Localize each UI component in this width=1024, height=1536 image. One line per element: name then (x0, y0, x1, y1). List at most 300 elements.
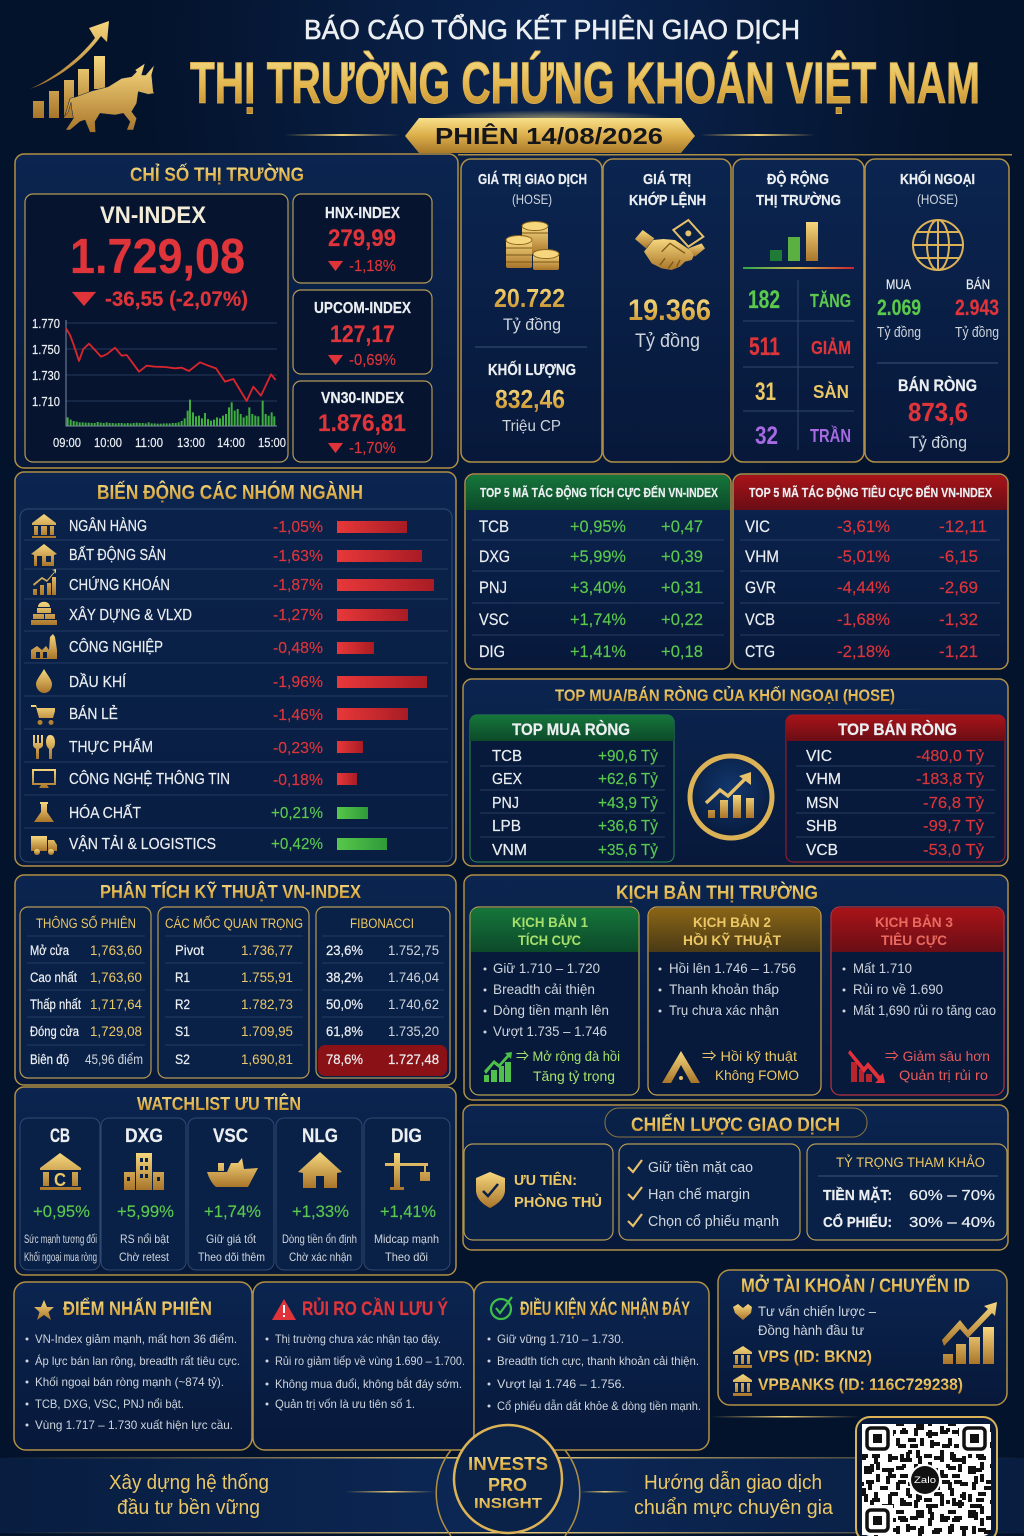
card: foreign investors: Tỷ đồng (877, 324, 921, 341)
panel: risks: Thị trường chưa xác nhận tạo đáy. (275, 1332, 441, 1346)
footer slogan left: Xây dựng hệ thống (109, 1472, 269, 1494)
card: DXG (101, 1118, 186, 1270)
panel: market scenarios (464, 875, 1008, 1100)
panel: session highlights: TCB, DXG, VSC, PNJ nổi bật. (35, 1397, 184, 1411)
table: top net buy: +36,6 Tỷ (598, 818, 658, 835)
VN30-Index card (293, 381, 432, 462)
card: matched order value: Tỷ đồng (635, 331, 700, 352)
row: food (69, 738, 363, 757)
table: top net buy: +62,6 Tỷ (598, 771, 658, 788)
card: allocation: 30% – 40% (909, 1214, 995, 1231)
card: matched order value: GIÁ TRỊ (643, 171, 691, 188)
card: trading value: GIÁ TRỊ GIAO DỊCH (478, 171, 587, 188)
table: top positive impact: DIG (479, 642, 505, 661)
heading: strategy: CHIẾN LƯỢC GIAO DỊCH (631, 1114, 840, 1136)
card: NLG: Chờ xác nhận (289, 1250, 352, 1264)
card: priority defensive: ƯU TIÊN: (514, 1171, 577, 1189)
panel: bottom confirmation: Breadth tích cực, thanh khoản cải thiện. (497, 1354, 699, 1368)
row: chemicals: +0,21% (271, 805, 323, 822)
panel: bottom confirmation (474, 1282, 709, 1450)
card: market breadth (733, 159, 864, 462)
panel: session highlights: Khối ngoại bán ròng mạnh (~874 tỷ). (35, 1375, 224, 1389)
panel: risks (253, 1282, 474, 1450)
table: top positive impact (465, 474, 731, 669)
table: session stats: Đóng cửa (30, 1024, 79, 1039)
card: trading value: 20.722 (494, 283, 565, 313)
line chart: intraday VN-Index: 09:00 (53, 435, 81, 450)
card: CB: +0,95% (33, 1203, 90, 1221)
table: key levels: R1 (175, 970, 190, 985)
card: foreign investors: KHỐI NGOẠI (900, 170, 975, 188)
footer slogan right: Hướng dẫn giao dịch (644, 1471, 822, 1494)
card: DIG (364, 1118, 450, 1270)
QR code (856, 1417, 997, 1536)
panel: session highlights: Áp lực bán lan rộng, breadth rất tiêu cực. (35, 1353, 240, 1368)
table: top positive impact: +0,47 (661, 517, 703, 536)
UPCOM-Index card: 127,17 (330, 321, 395, 348)
table: top positive impact: +0,18 (661, 642, 703, 661)
row: securities: CHỨNG KHOÁN (69, 577, 170, 594)
card: trading value: (HOSE) (512, 191, 552, 207)
VN30-Index card: 1.876,81 (318, 410, 406, 437)
card: market breadth: ĐỘ RỘNG (767, 170, 829, 188)
table: top negative impact: -3,61% (837, 517, 890, 536)
row: logistics: VẬN TẢI & LOGISTICS (69, 836, 216, 853)
card: market breadth: SÀN (813, 381, 849, 402)
table: top positive impact: VSC (479, 610, 509, 629)
card: CB (20, 1118, 100, 1270)
HNX-Index card: HNX-INDEX (325, 205, 400, 222)
date banner (405, 110, 695, 153)
row: food: THỰC PHẨM (69, 738, 153, 756)
icon: handshake (635, 220, 705, 270)
table: top negative impact: -2,18% (837, 642, 890, 661)
scenario 2: technical rebound: Hồi lên 1.746 – 1.756 (669, 960, 796, 976)
row: chemicals: HÓA CHẤT (69, 805, 141, 822)
table: fibonacci: 61,8% (326, 1024, 363, 1039)
panel: risks: RỦI RO CẦN LƯU Ý (302, 1298, 448, 1320)
card: foreign investors (865, 159, 1009, 462)
panel: open account: Đồng hành đầu tư (758, 1322, 864, 1338)
card: matched order value (603, 159, 731, 462)
table: top negative impact: -1,21 (939, 642, 978, 661)
logo: bull and rising chart (30, 21, 154, 132)
footer band (0, 1416, 1024, 1536)
panel: technical analysis (15, 875, 456, 1085)
icon: down chart (848, 1050, 885, 1083)
scenario 3: negative: Rủi ro về 1.690 (853, 981, 943, 997)
scenario 3: negative: ⇒ Giảm sâu hơn (885, 1048, 990, 1064)
VN30-Index card: VN30-INDEX (321, 390, 404, 407)
table: top net buy (470, 715, 674, 862)
table: session stats: Cao nhất (30, 970, 77, 985)
table: key levels: 1.709,95 (241, 1024, 293, 1039)
panel: session highlights: ĐIỂM NHẤN PHIÊN (63, 1298, 212, 1320)
heading: watchlist: WATCHLIST ƯU TIÊN (137, 1093, 301, 1114)
row: industry: -0,48% (273, 640, 323, 657)
card: priority defensive (464, 1144, 613, 1240)
table: top positive impact: +0,39 (661, 547, 703, 566)
VN-Index card: 1.729,08 (70, 230, 245, 284)
table: top negative impact: VIC (745, 517, 770, 536)
scenario 3: negative: Quản trị rủi ro (899, 1067, 988, 1083)
table: session stats: 45,96 điểm (85, 1052, 143, 1067)
card: DXG: Chờ retest (119, 1250, 170, 1264)
row: real estate: -1,63% (273, 548, 323, 565)
panel: risks: Rủi ro giảm tiếp về vùng 1.690 – 1.700. (275, 1354, 465, 1368)
table: session stats: 1,729,08 (90, 1024, 142, 1039)
icon: coin stacks (506, 222, 559, 270)
row: securities: -1,87% (273, 577, 323, 594)
scenario 1: positive (470, 907, 639, 1095)
table: top negative impact: -1,32 (939, 610, 978, 629)
card: market breadth: 31 (755, 378, 776, 406)
scenario 3: negative: KỊCH BẢN 3 (875, 914, 953, 930)
table: top net sell: VHM (806, 771, 841, 788)
table: key levels: 1,690,81 (241, 1052, 293, 1067)
row: real estate (69, 547, 422, 565)
line chart: intraday VN-Index: 1.730 (32, 369, 60, 383)
brand badge: INSIGHT (474, 1495, 542, 1512)
card: trading value: Triệu CP (502, 418, 561, 435)
panel: trading strategy (463, 1105, 1008, 1250)
table: fibonacci: 23,6% (326, 943, 363, 958)
row: construction: -1,27% (273, 607, 323, 624)
panel: open account: VPBANKS (ID: 116C729238) (758, 1376, 963, 1394)
table: top negative impact: -12,11 (939, 517, 987, 536)
table: fibonacci: 1.735,20 (388, 1024, 439, 1039)
panel: open account: VPS (ID: BKN2) (758, 1348, 872, 1366)
scenario 2: technical rebound: Trụ chưa xác nhận (669, 1002, 779, 1018)
table: session stats: 1,717,64 (90, 997, 142, 1012)
panel: session highlights: Vùng 1.717 – 1.730 xuất hiện lực cầu. (35, 1418, 233, 1432)
table: top negative impact: CTG (745, 642, 775, 661)
table: top positive impact: +1,41% (570, 642, 626, 661)
table: top positive impact: TCB (479, 517, 509, 536)
card: market breadth: THỊ TRƯỜNG (756, 191, 841, 209)
row: securities (69, 577, 434, 594)
scenario 3: negative: TIÊU CỰC (881, 931, 947, 948)
card: priority defensive: PHÒNG THỦ (514, 1193, 602, 1211)
table: top positive impact: +0,31 (661, 578, 703, 597)
table: key levels (158, 907, 309, 1078)
icon: handshake small (733, 1304, 752, 1320)
card: DXG: +5,99% (117, 1203, 174, 1221)
table: top net sell: -53,0 Tỷ (923, 842, 984, 859)
row: banks (69, 518, 407, 536)
heading: sectors: BIẾN ĐỘNG CÁC NHÓM NGÀNH (97, 480, 363, 504)
icon: globe (913, 220, 963, 270)
line chart: intraday VN-Index: 1.770 (32, 317, 60, 331)
line chart: intraday VN-Index: 14:00 (217, 435, 245, 450)
row: chemicals (69, 805, 368, 822)
table: fibonacci: 50,0% (326, 997, 363, 1012)
card: foreign investors: MUA (886, 276, 912, 292)
UPCOM-Index card (293, 290, 432, 374)
card: DIG: Theo dõi (385, 1250, 428, 1264)
row: construction: XÂY DỰNG & VLXD (69, 607, 192, 624)
heading: market indices: CHỈ SỐ THỊ TRƯỜNG (130, 164, 304, 186)
card: CB: Sức mạnh tương đối (24, 1234, 97, 1246)
card: allocation: TỶ TRỌNG THAM KHẢO (836, 1154, 985, 1170)
heading: foreign flow: TOP MUA/BÁN RÒNG CỦA KHỐI NGOẠI (HOSE) (555, 685, 895, 705)
table: key levels: S1 (175, 1024, 190, 1039)
footer slogan right (634, 1471, 834, 1519)
icon: breadth bars (743, 222, 854, 269)
scenario 2: technical rebound: HỒI KỸ THUẬT (683, 931, 781, 948)
row: banks: -1,05% (273, 519, 323, 536)
scenario 1: positive: Vượt 1.735 – 1.746 (493, 1023, 607, 1039)
row: food: -0,23% (273, 740, 323, 757)
table: top negative impact: -2,69 (939, 578, 978, 597)
card: NLG: NLG (302, 1126, 338, 1147)
table: key levels: R2 (175, 997, 190, 1012)
brand badge: INVESTS (468, 1454, 548, 1474)
scenario 2: technical rebound (648, 907, 821, 1095)
scenario 1: positive: Dòng tiền mạnh lên (493, 1002, 609, 1018)
table: fibonacci: 1.740,62 (388, 997, 439, 1012)
line chart: intraday VN-Index: 15:00 (258, 435, 286, 450)
icon: up chart (484, 1052, 512, 1082)
card: DXG: DXG (125, 1126, 163, 1147)
table: key levels: S2 (175, 1052, 190, 1067)
card: VSC: Giữ giá tốt (206, 1232, 257, 1246)
scenario 1: positive: Tăng tỷ trọng (533, 1068, 615, 1084)
panel: risks: Không mua đuổi, không bắt đáy sớm. (275, 1376, 462, 1391)
card: VSC: Theo dõi thêm (198, 1250, 265, 1264)
row: banks: NGÂN HÀNG (69, 518, 147, 535)
card: market breadth: GIẢM (811, 337, 851, 358)
card: foreign investors: 2.943 (955, 295, 999, 320)
card: trading value: KHỐI LƯỢNG (488, 359, 576, 379)
table: session stats: 1,763,60 (90, 943, 142, 958)
row: logistics: +0,42% (271, 836, 323, 853)
row: industry: CÔNG NGHIỆP (69, 639, 163, 656)
card: checklist: Chọn cổ phiếu mạnh (648, 1214, 779, 1230)
table: fibonacci (316, 907, 450, 1078)
scenario 3: negative (831, 907, 1004, 1095)
card: NLG: Dòng tiền ổn định (282, 1232, 357, 1246)
scenario 2: technical rebound: ⇒ Hồi kỹ thuật (702, 1048, 797, 1064)
line chart: intraday VN-Index: 10:00 (94, 435, 122, 450)
table: top negative impact: GVR (745, 578, 776, 597)
card: allocation (807, 1144, 1007, 1240)
table: top net buy: +90,6 Tỷ (598, 748, 658, 765)
card: trading value: Tỷ đồng (503, 315, 561, 334)
scenario 1: positive: ⇒ Mở rộng đà hồi (516, 1048, 620, 1064)
card: checklist: Hạn chế margin (648, 1187, 750, 1203)
table: top negative impact (733, 474, 1008, 669)
card: VSC (188, 1118, 274, 1270)
table: top net buy: +35,6 Tỷ (598, 842, 658, 859)
table: top net sell (786, 715, 1005, 862)
table: top net buy: TCB (492, 748, 522, 765)
table: top net buy: +43,9 Tỷ (598, 795, 658, 812)
card: foreign investors: (HOSE) (917, 191, 958, 207)
VN-Index card: VN-INDEX (100, 202, 206, 229)
card: market breadth: TĂNG (810, 290, 851, 311)
line chart: intraday VN-Index: 13:00 (177, 435, 205, 450)
HNX-Index card: 279,99 (328, 225, 396, 252)
table: session stats: THÔNG SỐ PHIÊN (36, 916, 136, 931)
card: allocation: 60% – 70% (909, 1187, 995, 1204)
icon: bank VPBanks (733, 1374, 752, 1396)
row: retail (69, 706, 408, 724)
header (30, 14, 980, 153)
table: fibonacci: 1.727,48 (388, 1052, 439, 1067)
card: matched order value: KHỚP LỆNH (629, 191, 706, 209)
footer slogan left: đầu tư bền vững (117, 1497, 260, 1519)
table: top positive impact: +0,22 (661, 610, 703, 629)
panel: watchlist (15, 1087, 456, 1275)
card: market breadth: 511 (749, 333, 780, 361)
table: top negative impact: -6,15 (939, 547, 978, 566)
table: top negative impact: VHM (745, 547, 779, 566)
scenario 2: technical rebound: Không FOMO (715, 1067, 799, 1083)
table: top net sell: -76,8 Tỷ (923, 795, 984, 812)
card: foreign investors: BÁN RÒNG (898, 376, 977, 395)
table: top positive impact: +0,95% (570, 517, 626, 536)
table: top positive impact: TOP 5 MÃ TÁC ĐỘNG TÍCH CỰC ĐẾN VN-INDEX (480, 485, 718, 500)
line chart: intraday VN-Index: 11:00 (135, 435, 163, 450)
table: top net buy: GEX (492, 771, 522, 788)
scenario 2: technical rebound: Thanh khoản thấp (669, 981, 779, 997)
icon: caution triangle (662, 1051, 700, 1083)
VN-Index card (25, 194, 288, 462)
row: industry (69, 639, 374, 657)
table: top net sell: -480,0 Tỷ (916, 748, 984, 765)
UPCOM-Index card: -0,69% (349, 352, 396, 369)
VN-Index card: -36,55 (-2,07%) (105, 288, 248, 311)
scenario 1: positive: Breadth cải thiện (493, 981, 595, 997)
heading: technical analysis: PHÂN TÍCH KỸ THUẬT VN-INDEX (100, 881, 361, 902)
card: checklist (619, 1144, 800, 1240)
table: top net sell: MSN (806, 795, 839, 812)
heading: open account: MỞ TÀI KHOẢN / CHUYỂN ID (741, 1275, 970, 1297)
table: top positive impact: PNJ (479, 578, 507, 597)
panel: open account: Tư vấn chiến lược – (758, 1303, 876, 1319)
card: checklist: Giữ tiền mặt cao (648, 1160, 753, 1176)
heading: strategy (605, 1108, 867, 1137)
UPCOM-Index card: UPCOM-INDEX (314, 300, 411, 317)
table: top positive impact: +1,74% (570, 610, 626, 629)
card: NLG (276, 1118, 362, 1270)
card: CB: C (54, 1170, 66, 1190)
row: retail: -1,46% (273, 707, 323, 724)
panel: bottom confirmation: Giữ vững 1.710 – 1.730. (497, 1332, 624, 1346)
scenario 1: positive: Giữ 1.710 – 1.720 (493, 960, 600, 976)
panel: sector moves (15, 472, 456, 866)
table: top negative impact: -5,01% (837, 547, 890, 566)
card: DXG: RS nổi bật (120, 1232, 170, 1246)
scenario 1: positive: TÍCH CỰC (518, 932, 581, 948)
card: CB: Khối ngoại mua ròng (24, 1252, 97, 1264)
row: real estate: BẤT ĐỘNG SẢN (69, 547, 166, 564)
card: trading value: 832,46 (495, 384, 565, 414)
scenario 3: negative: Mất 1,690 rủi ro tăng cao (853, 1002, 996, 1018)
report subtitle: BÁO CÁO TỔNG KẾT PHIÊN GIAO DỊCH (304, 14, 800, 45)
line chart: intraday VN-Index: 1.710 (32, 395, 60, 409)
footer slogan left (109, 1472, 269, 1519)
card: market breadth: TRẦN (810, 425, 851, 446)
card: market breadth: 32 (755, 422, 778, 450)
brand badge (436, 1425, 580, 1536)
HNX-Index card: -1,18% (349, 258, 396, 275)
scenario 1: positive: KỊCH BẢN 1 (512, 914, 588, 930)
footer slogan right: chuẩn mực chuyên gia (634, 1497, 834, 1519)
card: foreign investors: 873,6 (908, 397, 968, 427)
panel: session highlights: VN-Index giảm mạnh, mất hơn 36 điểm. (35, 1332, 237, 1346)
brand badge: PRO (488, 1475, 527, 1495)
card: DIG: DIG (391, 1126, 422, 1147)
scenario 2: technical rebound: KỊCH BẢN 2 (693, 914, 771, 930)
icons: sector pictograms (31, 514, 57, 855)
table: top net sell: TOP BÁN RÒNG (838, 720, 957, 739)
line chart: intraday VN-Index: 1.750 (32, 343, 60, 357)
table: key levels: 1.736,77 (241, 943, 293, 958)
row: logistics (69, 836, 387, 853)
card: trading value (461, 159, 602, 462)
table: top net sell: -183,8 Tỷ (916, 771, 984, 788)
card: VSC: +1,74% (204, 1203, 261, 1221)
row: oil and gas (69, 674, 427, 691)
row: retail: BÁN LẺ (69, 706, 118, 723)
table: top net buy: VNM (492, 842, 527, 859)
card: allocation: TIỀN MẶT: (823, 1187, 892, 1204)
table: session stats: 1,763,60 (90, 970, 142, 985)
row: IT: -0,18% (273, 772, 323, 789)
row: construction (69, 607, 408, 624)
table: top net sell: -99,7 Tỷ (923, 818, 984, 835)
table: fibonacci: 78,6% (326, 1052, 363, 1067)
panel: market indices (15, 154, 458, 468)
card: foreign investors: Tỷ đồng (955, 324, 999, 341)
row: oil and gas: DẦU KHÍ (69, 674, 127, 691)
table: top positive impact: DXG (479, 547, 510, 566)
panel: open account (718, 1270, 1007, 1405)
table: top negative impact: -4,44% (837, 578, 890, 597)
card: matched order value: 19.366 (628, 294, 711, 327)
QR code: Zalo (914, 1475, 936, 1486)
table: top negative impact: VCB (745, 610, 775, 629)
table: top net sell: VIC (806, 748, 832, 765)
table: session stats: Biên độ (30, 1052, 69, 1067)
card: foreign investors: 2.069 (877, 295, 921, 320)
VN30-Index card: -1,70% (349, 440, 396, 457)
table: top positive impact: +5,99% (570, 547, 626, 566)
card: NLG: +1,33% (292, 1203, 349, 1221)
card: CB: CB (50, 1126, 70, 1147)
table: top positive impact: +3,40% (570, 578, 626, 597)
icon: bank VPS (733, 1346, 752, 1368)
row: IT (69, 771, 357, 789)
panel: foreign top buy/sell (463, 679, 1008, 866)
table: session stats: Thấp nhất (30, 997, 81, 1012)
table: top net sell: VCB (806, 842, 838, 859)
table: top net buy: LPB (492, 818, 521, 835)
table: top net buy: PNJ (492, 795, 519, 812)
table: top negative impact: -1,68% (837, 610, 890, 629)
table: fibonacci: FIBONACCI (350, 916, 414, 931)
line chart: intraday VN-Index (32, 317, 286, 450)
panel: bottom confirmation: ĐIỀU KIỆN XÁC NHẬN ĐÁY (520, 1298, 690, 1320)
panel: risks: Quản trị vốn là ưu tiên số 1. (275, 1397, 415, 1411)
card: market breadth: 182 (748, 286, 780, 314)
card: DIG: Midcap mạnh (374, 1232, 439, 1246)
card: DIG: +1,41% (380, 1203, 436, 1221)
panel: bottom confirmation: Vượt lại 1.746 – 1.756. (497, 1377, 625, 1391)
table: key levels: Pivot (175, 943, 204, 958)
